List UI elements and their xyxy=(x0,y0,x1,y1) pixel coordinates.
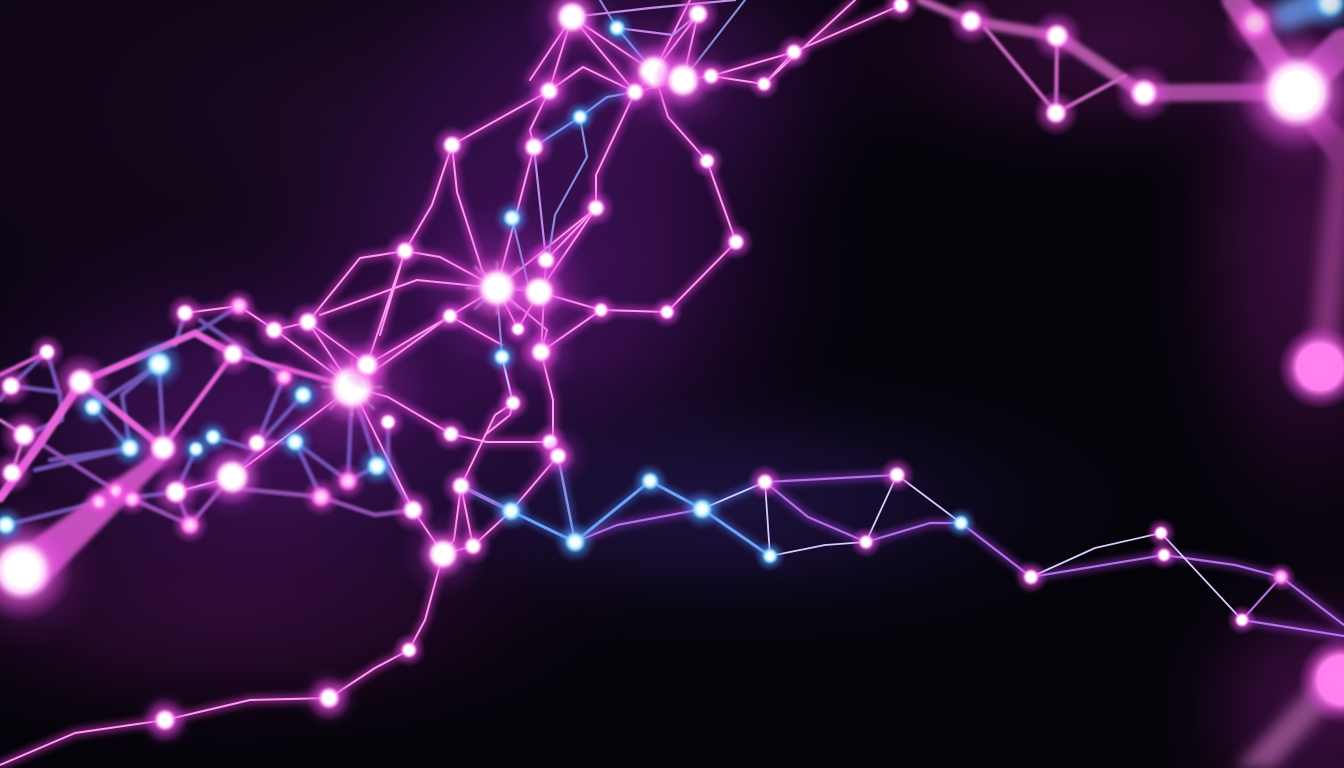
tapered beam from bright left node xyxy=(8,450,166,590)
nodes: right chain xyxy=(491,457,1296,635)
nodes: left cluster xyxy=(0,288,435,622)
blue and violet lines: glow xyxy=(461,28,1344,636)
blurred background strands: right edge and corner xyxy=(1236,0,1344,768)
nodes: central cluster xyxy=(142,70,754,743)
star flares on hub nodes xyxy=(322,262,528,416)
blurred thick pink strands: left xyxy=(0,333,352,498)
pink network lines xyxy=(0,0,901,765)
nodes: large blurred right side xyxy=(1223,0,1344,724)
nodes: top cluster xyxy=(545,0,1174,136)
triangle strands: top right xyxy=(985,28,1125,113)
blurred violet and blue strands: left xyxy=(0,306,413,525)
blurred thick strands: top right xyxy=(920,0,1344,155)
blue and violet lines xyxy=(461,0,1344,636)
pink line glow xyxy=(0,0,901,765)
